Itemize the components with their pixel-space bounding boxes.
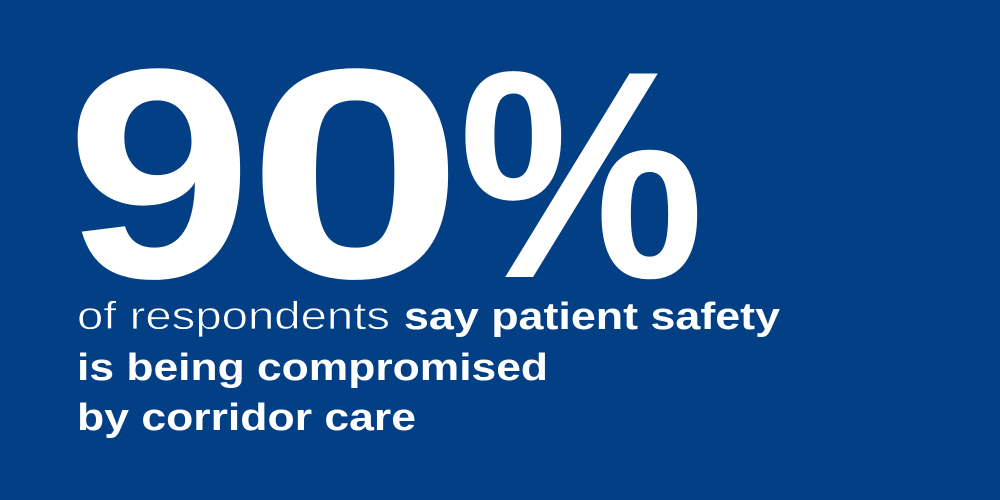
headline statistic: 90% [66,6,704,341]
caption line 1: say patient safety [404,296,780,338]
headline statistic: 90%: 0 [247,6,464,341]
headline statistic: 90%: 9 [66,7,253,341]
caption text [77,295,780,439]
caption line 1: of respondents [77,295,390,338]
caption line 3: by corridor care [77,397,416,439]
headline statistic: 90%: % [458,9,704,340]
caption line 2: is being compromised [77,347,548,389]
